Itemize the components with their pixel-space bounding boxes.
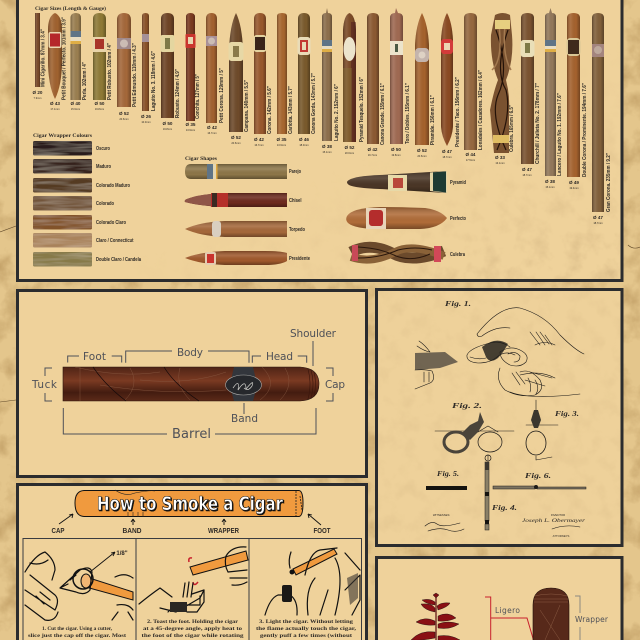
cigar: double corona: 19.4mm [569, 186, 579, 190]
cigar: culebra: 13.1mm [495, 161, 505, 165]
step 2 text: 2. Toast the foot. Holding the cigar [147, 619, 239, 625]
cigar: presidente: Ø 47 [442, 149, 452, 154]
cigar callouts: CAP [52, 526, 64, 535]
title: How to Smoke a Cigar [97, 493, 283, 515]
cigar: lonsdale: Ø 44 [466, 152, 476, 157]
patent signatures: INVENTOR [551, 513, 565, 517]
shape: pyramid [347, 171, 466, 193]
panel: tobacco leaves and filler [376, 558, 622, 640]
cigar: toro: 19.8mm [391, 153, 401, 157]
cigar: mini cigarillo: 7.9mm [34, 96, 41, 100]
cigar: culebra [490, 13, 515, 165]
icon: tobacco plant [411, 593, 460, 640]
patent signatures: ATTORNEYS [553, 534, 570, 538]
cigar: gran corona: Gran Corona. 235mm / 9.2" [606, 152, 612, 212]
step 1 illustration: cutting the cigar: 1/8" [116, 551, 128, 557]
shape: torpedo [185, 221, 306, 237]
heading: cigar shapes: Cigar Shapes [185, 156, 218, 162]
bracket lines [45, 341, 333, 434]
filler cigar [533, 588, 569, 640]
wrapper bracket [575, 596, 580, 640]
shape: perfecto [346, 207, 467, 229]
cigar: lancero: Ø 38 [545, 179, 555, 184]
panel: how to smoke a cigar [18, 484, 366, 640]
cigar: petit robusto: Ø 50 [95, 101, 105, 106]
cigar: conchita: Ø 35 [186, 122, 196, 127]
wrapper swatches: Colorado Maduro [96, 183, 131, 189]
cigar: petit edmundo: Ø 52 [119, 111, 129, 116]
wrapper swatches: Double Claro / Candela [96, 257, 142, 263]
cigar: petit corona: Ø 42 [207, 125, 217, 130]
label: tuck: Tuck [31, 379, 58, 391]
cigar: pyramid tesquelo: 20.6mm [345, 151, 354, 155]
wrapper swatches: Claro / Connecticut [96, 238, 134, 244]
cigar: pyramid tesquelo: Ø 52 [345, 145, 355, 150]
cigar: laguito no. 3: 10.3mm [141, 120, 151, 124]
cigar callouts: FOOT [314, 526, 331, 535]
cigar: corona [254, 13, 273, 147]
cigar: laguito no. 2 [322, 8, 340, 154]
cigar: campana [228, 13, 250, 145]
cigar: petit bouquet: Petit Bouquet / Perfecto. 101mm / 3.9" [61, 16, 67, 100]
cigar: churchill [520, 13, 541, 177]
cigar: petit robusto: Petit Robusto. 102mm / 4" [107, 42, 113, 100]
step 2 illustration: toasting the foot [139, 547, 248, 612]
cigar: double corona: Ø 49 [569, 180, 579, 185]
step 2 text [142, 619, 244, 640]
wrapper swatches: Oscuro [96, 146, 111, 152]
step 3 text [256, 619, 357, 640]
cigar: lancero: 15.1mm [545, 185, 555, 189]
shape: presidente: Presidente [289, 256, 310, 262]
cigar: canona gorda: 18.3mm [299, 143, 309, 147]
label: barrel: Barrel [172, 427, 211, 442]
shape: presidente [185, 251, 310, 265]
cigar: corona: Ø 42 [254, 137, 264, 142]
cigar: canona grande: 16.7mm [368, 153, 377, 157]
cigar: lancero: Lancero / Laguito No. 1. 192mm / 7.6" [557, 92, 563, 176]
cigar: carlotta: Carlotta. 143mm / 5.7" [288, 85, 294, 134]
cigar: petit edmundo [117, 13, 138, 121]
cigar: perla: 15.9mm [71, 107, 80, 111]
fig 2: scissors cutter: Fig. 2. [452, 402, 482, 410]
step 3 text: 3. Light the cigar. Without letting [259, 619, 353, 625]
cigar: canona grande: Ø 42 [368, 147, 378, 152]
patent signatures: Joseph L. Obermayer [522, 518, 586, 524]
shape: chisel: Chisel [289, 198, 302, 204]
cigar: double corona: Double Corona / Prominente. 194mm / 7.6" [582, 82, 588, 177]
step 1 text: 1. Cut the cigar. Using a cutter, [42, 626, 113, 632]
cigar: petit corona [206, 13, 225, 135]
cigar: conchita: 13.9mm [186, 128, 195, 132]
heading: cigar sizes: Cigar Sizes (Length & Gauge) [35, 5, 106, 12]
heading: wrapper colours: Cigar Wrapper Colours [33, 133, 93, 139]
ligero leader lines [485, 597, 535, 640]
fig 6: side bar: Fig. 6. [525, 472, 551, 480]
cigar: double corona [566, 13, 588, 190]
cigar: laguito no. 3: Ø 26 [141, 114, 151, 119]
cigar: campana: Campana. 140mm / 5.5" [244, 79, 250, 132]
cigar: robusto: Ø 50 [163, 121, 173, 126]
cigar: robusto: 19.8mm [163, 127, 172, 131]
cigar: gran corona: 18.7mm [593, 221, 603, 225]
cigar: robusto: Robusto. 124mm / 4.9" [175, 68, 181, 118]
shape: culebra [351, 245, 466, 262]
cigar: mini cigarillo: Ø 20 [33, 90, 43, 95]
fig 4: vertical bar [485, 462, 517, 530]
cigar: lancero [545, 8, 563, 189]
cigar: laguito no. 2: 15.1mm [322, 150, 332, 154]
panel: cigar anatomy [18, 290, 366, 476]
step 2 text: at a 45-degree angle, apply heat to [143, 626, 242, 632]
patent signatures [425, 513, 586, 538]
step 3 illustration: lighting the cigar [265, 548, 360, 615]
fig 5: bar: Fig. 5. [437, 470, 459, 478]
cigar callouts [52, 514, 331, 535]
cigar: laguito no. 3: Laguito No. 3. 118mm / 4.6" [151, 50, 157, 111]
panel: cigar sizes, wrappers and shapes [18, 0, 622, 280]
patent signatures: WITNESSES: [433, 513, 450, 517]
shape: parejo: Parejo [289, 169, 302, 175]
fig 6: side bar [493, 472, 586, 489]
label: shoulder: Shoulder [290, 328, 337, 340]
wrapper swatches: Maduro [96, 164, 112, 170]
label: band: Band [231, 413, 258, 425]
cigar: robusto [160, 13, 181, 131]
cigar: canona grande: Canona Grande. 155mm / 6.1" [380, 82, 386, 145]
cigar: perla [70, 13, 88, 111]
cigar: churchill: 18.7mm [522, 173, 532, 177]
label: body: Body [177, 347, 203, 359]
label: cap: Cap [325, 379, 345, 391]
cigar: corona: 16.7mm [254, 143, 264, 147]
step 1 illustration: cutting the cigar [25, 551, 133, 620]
cigar: petit bouquet: Ø 43 [50, 101, 60, 106]
cigar: pyramid tesquelo [343, 13, 365, 155]
cigar: carlotta: Ø 35 [277, 137, 287, 142]
label: head: Head [266, 351, 293, 363]
fig 1: hand and cigar: Fig. 1. [445, 300, 471, 308]
cigar: piramide: Piramide. 156mm / 6.1" [430, 94, 436, 145]
wrapper swatches: Colorado Claro [96, 220, 127, 226]
cigar: petit edmundo: Petit Edmundo. 110mm / 4.3" [132, 42, 138, 107]
cigar: perla: Perla. 102mm / 4" [82, 61, 88, 100]
cigar: gran corona [592, 13, 612, 225]
step 1 text: slice just the cap off the cigar. Most [28, 633, 126, 639]
cigar: petit bouquet: 17.1mm [50, 107, 60, 111]
cigar: petit edmundo: 20.6mm [119, 117, 129, 121]
cigar: presidente: 18.7mm [442, 155, 452, 159]
cigar: carlotta [277, 13, 294, 147]
cigar: campana: 20.6mm [231, 141, 241, 145]
shape: torpedo: Torpedo [289, 227, 306, 233]
fig 2: scissors cutter [435, 402, 514, 461]
cigar band [226, 367, 262, 401]
shape: chisel [185, 193, 302, 207]
shape: culebra: Culebra [450, 252, 466, 258]
step 2 text: the foot of the cigar while rotating [142, 633, 244, 639]
cigar: lonsdale [464, 13, 484, 162]
steps box [23, 538, 362, 640]
cigar: petit corona: 16.7mm [207, 131, 217, 135]
cigar: petit corona: Petit Corona. 129mm / 5" [219, 67, 225, 123]
cigar: laguito no. 2: Laguito No. 2. 152mm / 6" [334, 83, 340, 141]
cigar: toro: Toro / Dobles. 155mm / 6.1" [405, 82, 411, 144]
cigar: culebra: Ø 33 [495, 155, 505, 160]
cigar callouts: BAND [122, 526, 142, 535]
cigar: gran corona: Ø 47 [593, 215, 603, 220]
cigar: carlotta: 13.9mm [277, 143, 286, 147]
cigar: conchita: Conchita. 127mm / 5" [195, 73, 201, 119]
cigar: presidente [441, 13, 461, 159]
step 1 text [28, 626, 126, 640]
cigar: lonsdale: 17.5mm [466, 158, 475, 162]
cigar: mini cigarillo: Mini Cigarillo. 87mm / 3.4" [40, 28, 46, 87]
cigar: petit robusto: 19.8mm [95, 107, 104, 111]
cigar: petit robusto [92, 13, 113, 111]
orange cigar title banner [75, 490, 303, 517]
cigar callouts: WRAPPER [208, 526, 239, 535]
shape: pyramid: Pyramid [450, 180, 466, 186]
fig 4: vertical bar: Fig. 4. [492, 504, 517, 512]
cigar: laguito no. 3 [141, 13, 157, 124]
shape: parejo [185, 164, 302, 179]
fig 3: cutter side view [526, 400, 579, 460]
cigar: toro: Ø 50 [391, 147, 401, 152]
cigar: canona gorda: Canona Gorda. 143mm / 5.7" [311, 72, 317, 134]
cigar: lonsdale: Lonsdales / Cazadores. 162mm / 6.4" [478, 69, 484, 150]
cigar: piramide: Ø 52 [417, 148, 427, 153]
anatomy cigar [63, 367, 319, 401]
cigar: culebra: Culebra. 165mm / 6.5" [509, 104, 515, 152]
cigar: piramide [415, 13, 436, 158]
cigar: canona gorda [298, 13, 317, 147]
fig 5: bar [426, 470, 467, 490]
cigar: presidente: Presidente / Taco. 156mm / 6.2" [455, 76, 461, 147]
wrapper swatches: Colorado [96, 201, 115, 207]
cigar: conchita [186, 13, 201, 132]
panel: patent drawing [376, 290, 622, 546]
cigar: petit bouquet [48, 13, 67, 111]
cigar: churchill: Ø 47 [522, 167, 532, 172]
wrapper swatches [33, 141, 142, 266]
cigar: perla: Ø 40 [71, 101, 81, 106]
fig 3: cutter side view: Fig. 3. [555, 410, 579, 418]
cigar: canona gorda: Ø 46 [299, 137, 309, 142]
cigar: pyramid tesquelo: Pyramid Tesquelo. 152mm / 6" [359, 76, 365, 142]
shape: perfecto: Perfecto [450, 216, 467, 222]
cigar: canona grande [367, 13, 386, 157]
label: ligero: Ligero [495, 606, 520, 615]
cigar: mini cigarillo [33, 13, 46, 100]
label: foot: Foot [83, 351, 106, 363]
cigar: toro [390, 8, 411, 157]
cigar: piramide: 20.6mm [417, 154, 427, 158]
cigar: laguito no. 2: Ø 38 [322, 144, 332, 149]
fig 1: hand and cigar [415, 300, 584, 397]
step 3 text: gently puff a few times (without [260, 632, 352, 639]
label: wrapper: Wrapper [575, 615, 609, 624]
cigar: corona: Corona. 142mm / 5.6" [267, 85, 273, 134]
step 3 text: the flame actually touch the cigar, [256, 626, 357, 632]
cigar: campana: Ø 52 [231, 135, 241, 140]
cigar: churchill: Churchill / Julieta No. 2. 178mm / 7" [535, 82, 541, 164]
